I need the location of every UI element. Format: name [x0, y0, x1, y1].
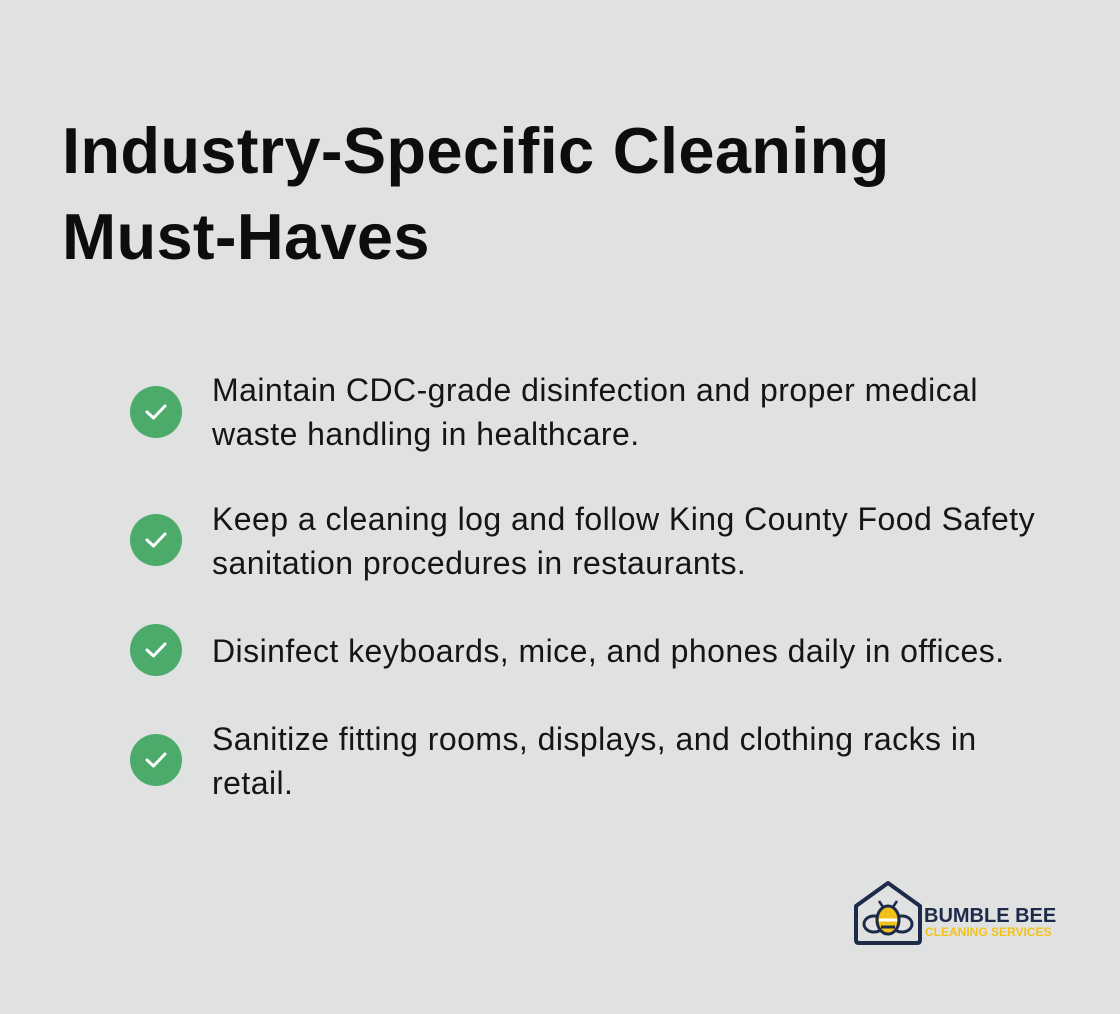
- text: Disinfect keyboards, mice, and phones daily in offices.: [212, 633, 1005, 669]
- item 3: [130, 624, 1005, 676]
- item 4: [130, 721, 977, 801]
- icon: bee house: [854, 881, 922, 945]
- icon: check: [130, 624, 182, 676]
- text: Keep a cleaning log and follow King County Food Safety: [212, 501, 1035, 537]
- title: [62, 114, 890, 273]
- brand name: BUMBLE BEE: [924, 905, 1056, 927]
- text: [212, 721, 977, 801]
- item 1: [130, 372, 978, 452]
- icon: check: [130, 514, 182, 566]
- text: [212, 372, 978, 452]
- brand tagline: CLEANING SERVICES: [925, 925, 1051, 939]
- icon: check: [130, 386, 182, 438]
- title: Industry-Specific Cleaning: [62, 114, 890, 187]
- icon: check: [130, 734, 182, 786]
- logo: [854, 881, 1056, 945]
- item 2: [130, 501, 1035, 581]
- text: [212, 501, 1035, 581]
- title: Must-Haves: [62, 200, 430, 273]
- text: retail.: [212, 765, 293, 801]
- text: Maintain CDC-grade disinfection and proper medical: [212, 372, 978, 408]
- text: sanitation procedures in restaurants.: [212, 545, 746, 581]
- text: Sanitize fitting rooms, displays, and clothing racks in: [212, 721, 977, 757]
- text: waste handling in healthcare.: [212, 416, 640, 452]
